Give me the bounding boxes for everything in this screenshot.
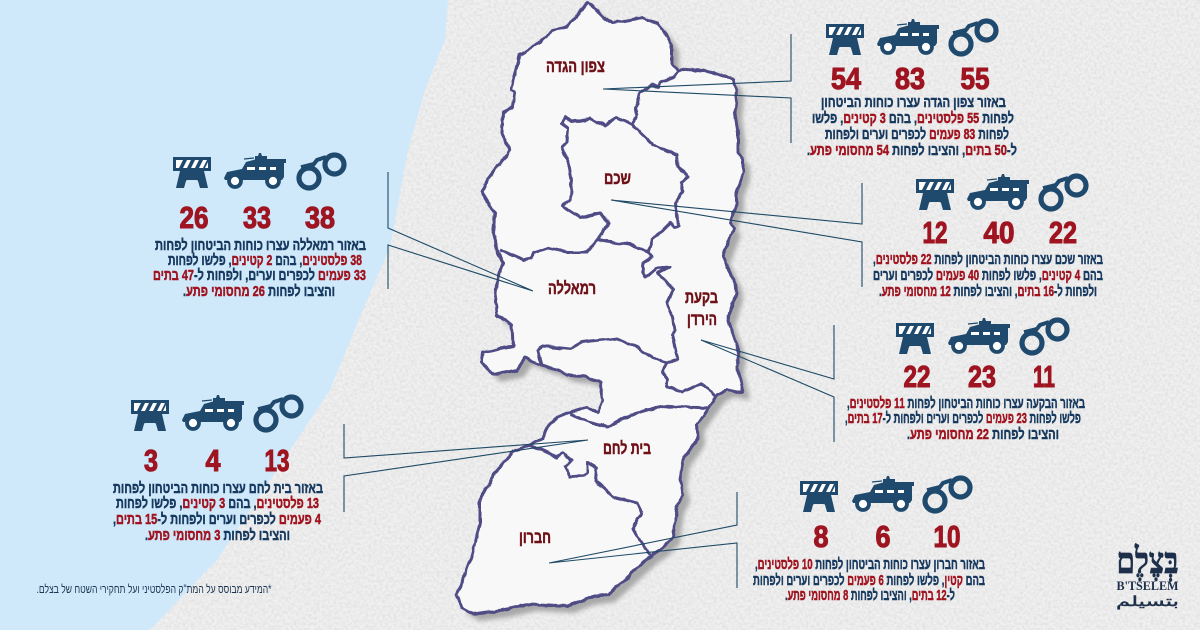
panel: Jordan Valley [845, 318, 1085, 443]
icon: handcuffs [925, 478, 970, 511]
icon: military vehicle [852, 476, 914, 510]
icon: military vehicle [182, 395, 244, 429]
callout lines: Ramallah [388, 172, 533, 291]
footnote: *המידע מבוסס על המת"ק הפלסטיני ועל תחקירי השטח של בצלם. [36, 582, 272, 596]
text block: והציבו לפחות 22 מחסומי פתע. [907, 426, 1059, 443]
text block: ולפחות ל-16 בתים, והציבו לפחות 12 מחסומי פתע. [879, 283, 1097, 300]
text block: והציבו לפחות 26 מחסומי פתע. [183, 283, 335, 300]
region label: Jordan Valley: בקעת [685, 288, 718, 307]
text block: 33 פעמים לכפרים וערים, ולפחות ל-47 בתים [153, 267, 366, 284]
number: checkpoints: 8 [814, 519, 828, 554]
text block: והציבו לפחות 3 מחסומי פתע. [145, 527, 290, 544]
text block [873, 251, 1103, 300]
number: raids: 33 [243, 200, 271, 235]
number: checkpoints: 12 [922, 215, 948, 250]
text block [113, 480, 323, 544]
region label: Nablus: שכם [604, 169, 631, 188]
callout lines: northern West Bank [603, 34, 791, 143]
number: arrests: 22 [1049, 215, 1077, 250]
panel: Ramallah [153, 153, 366, 300]
logo: B'Tselem: בְּצֶלֶם [1116, 541, 1178, 582]
icon: handcuffs [256, 397, 301, 430]
icon: handcuffs [951, 21, 996, 54]
text block: פלשו לפחות 23 פעמים לכפרים וערים ולפחות ל-17 בתים, [845, 410, 1081, 427]
text block: באזור צפון הגדה עצרו כוחות הביטחון [821, 94, 1006, 111]
icon: barricade [826, 24, 864, 55]
icon: barricade [896, 323, 934, 354]
text block [807, 94, 1017, 159]
text block: 4 פעמים לכפרים וערים ולפחות ל-15 בתים, [113, 511, 321, 528]
text block [753, 556, 985, 604]
icon: military vehicle [224, 153, 286, 187]
logo: B'Tselem: بتسيلم [1116, 594, 1179, 610]
number: arrests: 10 [934, 519, 960, 554]
number: checkpoints: 22 [904, 359, 930, 394]
text block: לפחות 55 פלסטינים, בהם 3 קטינים, פלשו [812, 110, 1014, 127]
panel: Bethlehem [113, 395, 323, 544]
text block [845, 395, 1085, 443]
text block: לפחות 83 פעמים לכפרים וערים ולפחות [825, 126, 1009, 143]
region label: Jordan Valley: הירדן [687, 310, 717, 329]
callout lines: Nablus [611, 183, 862, 287]
number: raids: 6 [876, 519, 890, 554]
text block: באזור בית לחם עצרו כוחות הביטחון לפחות [113, 480, 323, 497]
text block: 13 פלסטינים, בהם 3 קטינים, פלשו לפחות [116, 495, 319, 512]
text block [153, 237, 366, 300]
icon: handcuffs [1041, 176, 1086, 209]
icon: military vehicle [948, 318, 1010, 352]
logo: B'Tselem [1116, 541, 1179, 610]
icon: barricade [131, 400, 169, 431]
panel: northern West Bank [807, 19, 1017, 159]
callout lines: Hebron [549, 492, 737, 588]
number: checkpoints: 26 [180, 200, 208, 235]
callout lines: Bethlehem [344, 424, 588, 512]
number: checkpoints: 54 [831, 61, 862, 96]
number: raids: 83 [895, 61, 925, 96]
text block: 38 פלסטינים, בהם 2 קטינים, פלשו לפחות [168, 252, 362, 269]
number: arrests: 55 [960, 61, 990, 96]
number: raids: 4 [206, 443, 221, 478]
text block: בהם 4 קטינים, פלשו לפחות 40 פעמים לכפרים וערים [873, 267, 1103, 284]
text block: באזור הבקעה עצרו כוחות הביטחון לפחות 11 פלסטינים, [847, 395, 1085, 412]
icon: barricade [916, 179, 954, 210]
text block: באזור חברון עצרו כוחות הביטחון לפחות 10 פלסטינים, [755, 556, 985, 573]
number: raids: 40 [984, 215, 1014, 250]
icon: handcuffs [1022, 320, 1067, 353]
region label: Jordan Valley [685, 288, 718, 329]
number: raids: 23 [968, 359, 996, 394]
region label: Hebron: חברון [519, 528, 551, 547]
text block: בהם קטין, פלשו לפחות 6 פעמים לכפרים וערים ולפחות [753, 572, 985, 589]
text block: באזור רמאללה עצרו כוחות הביטחון לפחות [155, 237, 366, 254]
panel: Hebron [753, 476, 985, 604]
region label: northern West Bank: צפון הגדה [546, 57, 605, 76]
region label: Bethlehem: בית לחם [603, 439, 651, 458]
icon: military vehicle [967, 174, 1029, 208]
number: arrests: 11 [1033, 359, 1055, 394]
text block: באזור שכם עצרו כוחות הביטחון לפחות 22 פלסטינים, [873, 251, 1103, 268]
icon: handcuffs [299, 155, 344, 188]
map shadow [464, 10, 750, 621]
icon: barricade [173, 157, 211, 188]
panel: Nablus [873, 174, 1103, 300]
text block: ל-12 בתים, והציבו לפחות 8 מחסומי פתע. [785, 587, 955, 604]
icon: barricade [800, 481, 838, 512]
number: arrests: 13 [264, 443, 290, 478]
region label: Ramallah: רמאללה [548, 279, 596, 298]
number: checkpoints: 3 [144, 443, 158, 478]
map of the West Bank regions [457, 3, 743, 614]
number: arrests: 38 [305, 200, 335, 235]
logo: B'Tselem: B'TSELEM [1116, 578, 1178, 593]
text block: ל-50 בתים, והציבו לפחות 54 מחסומי פתע. [807, 142, 1017, 159]
icon: military vehicle [877, 19, 939, 53]
callout lines: Jordan Valley [701, 325, 834, 442]
